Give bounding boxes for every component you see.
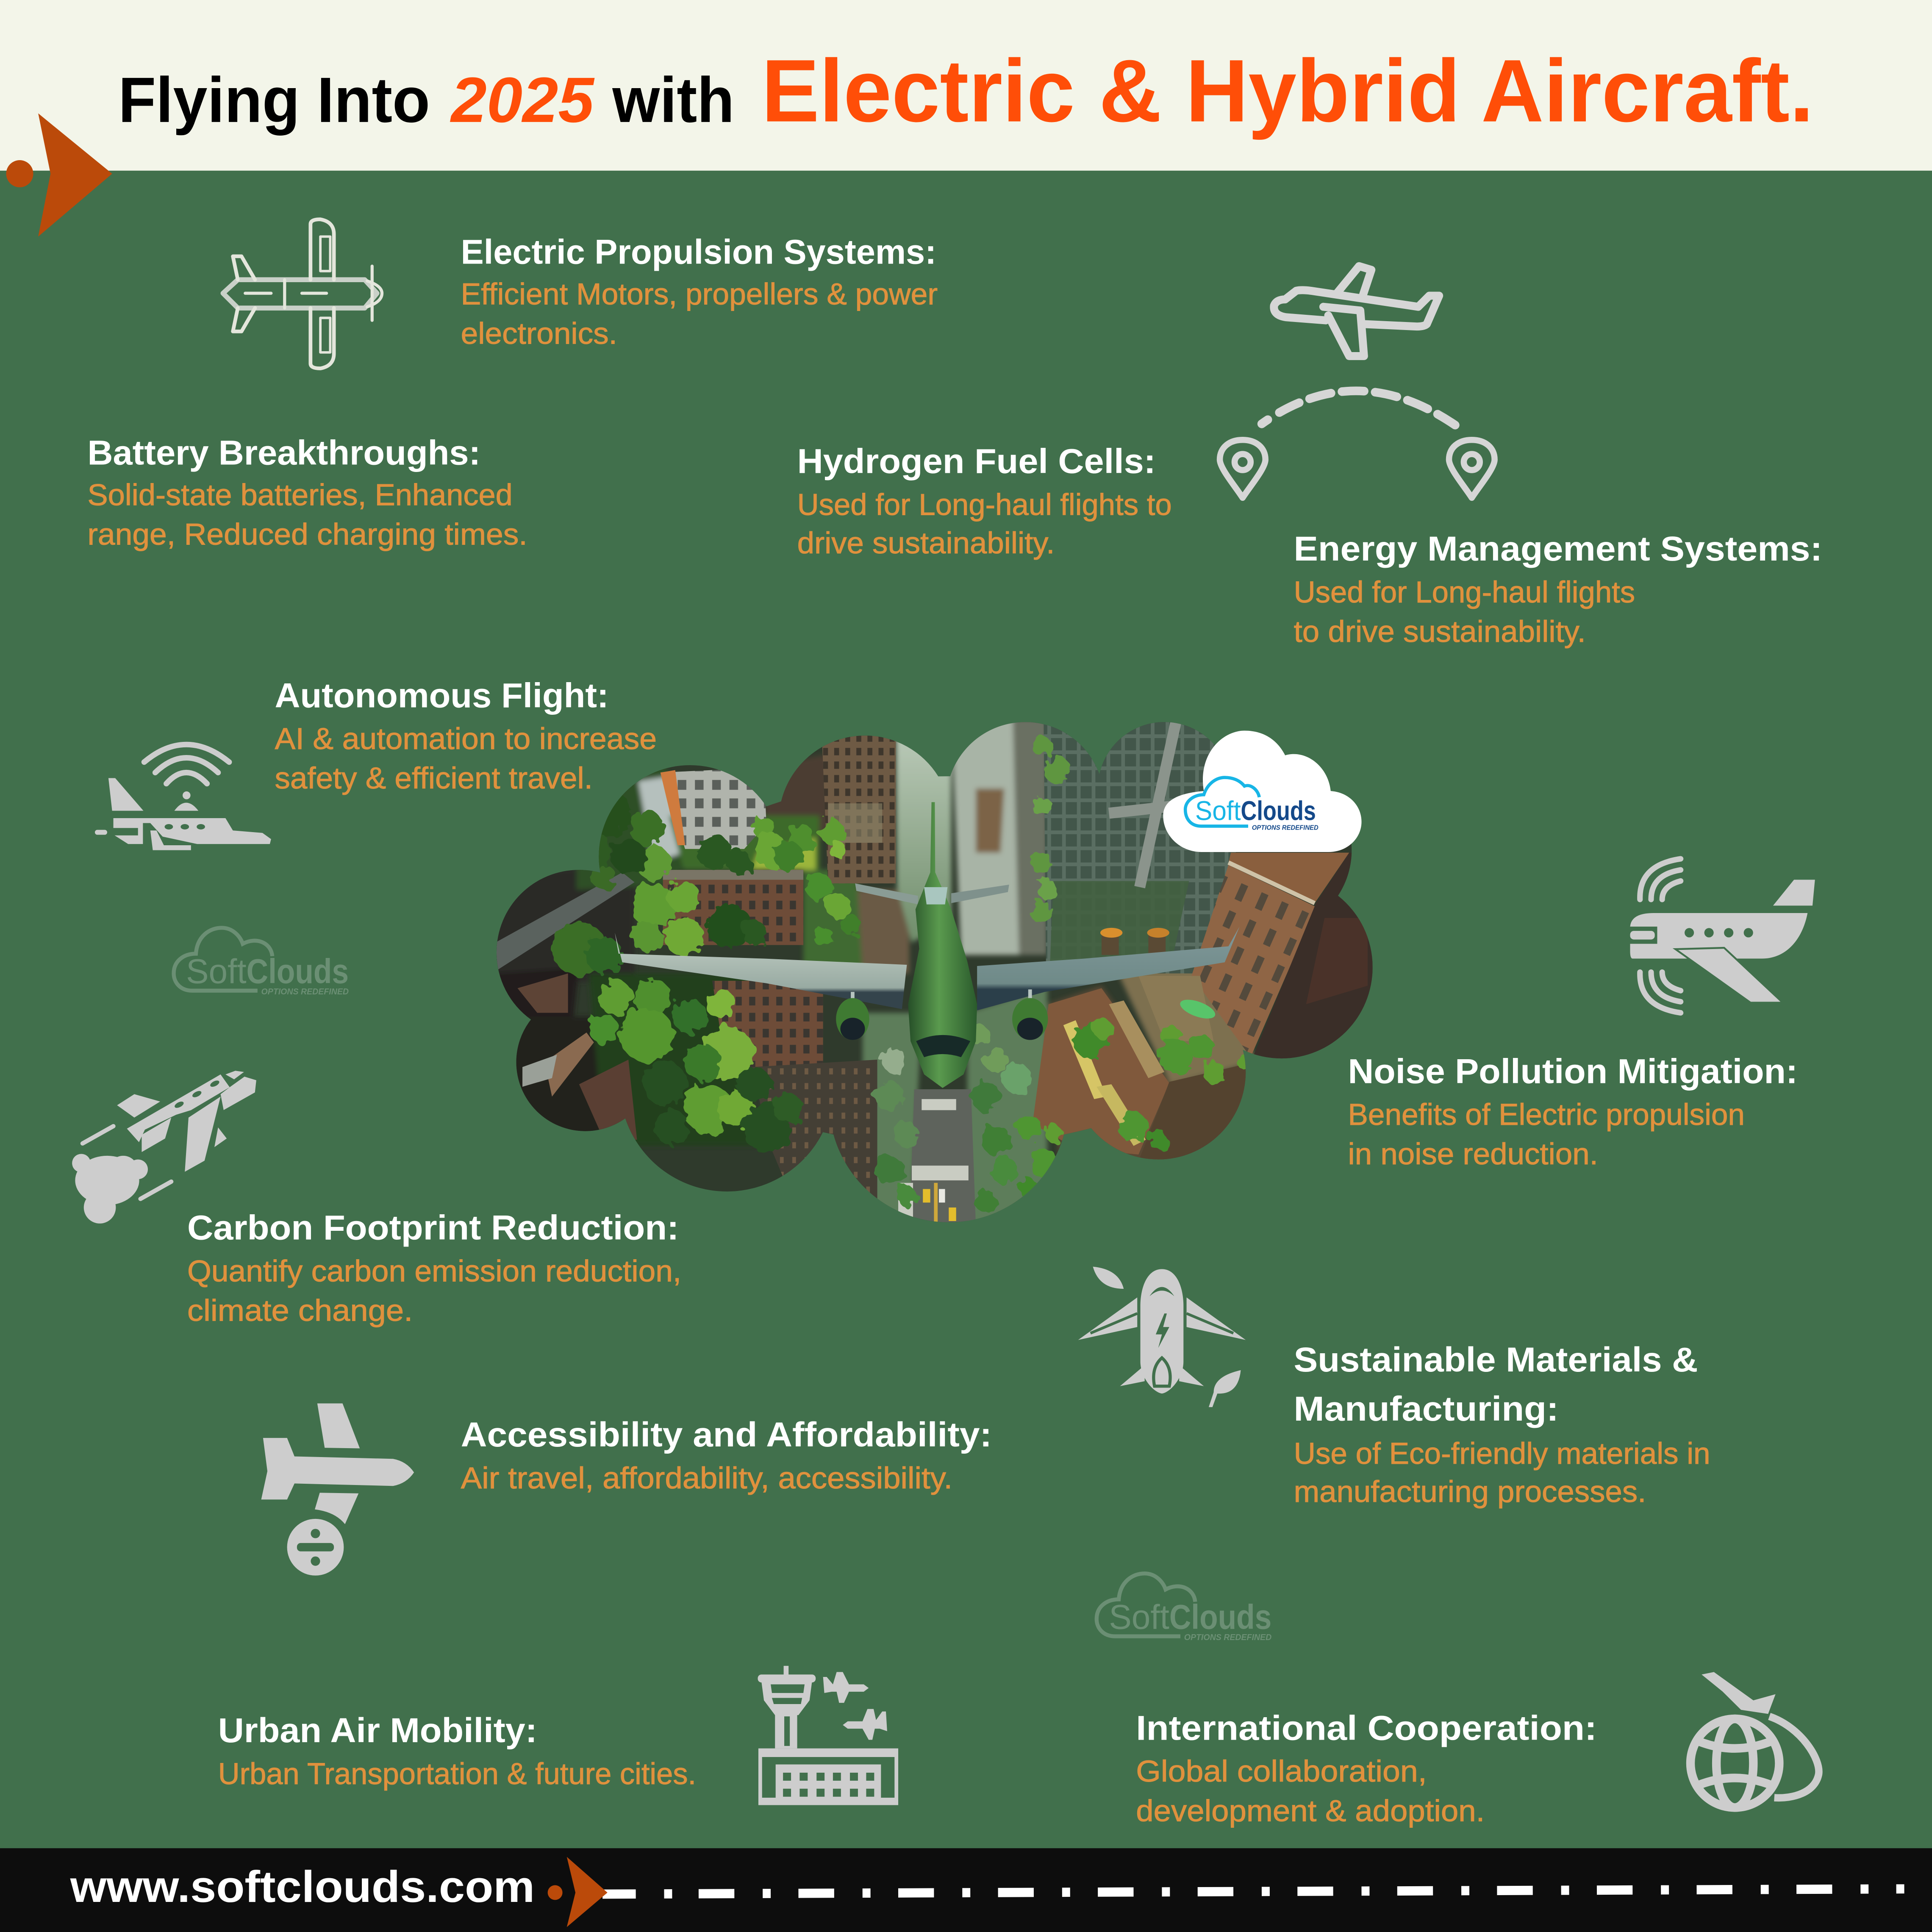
logo: SoftClouds in white cloud	[1163, 731, 1362, 852]
text: international cooperation: development & adoption.	[1136, 1794, 1485, 1828]
heading: carbon: Carbon Footprint Reduction:	[187, 1209, 679, 1247]
city background	[493, 715, 1380, 1226]
watermark logo left	[174, 928, 349, 997]
logo: SoftClouds in white cloud: OPTIONS REDEFINED	[1252, 824, 1319, 832]
icon: noise plane	[1630, 859, 1815, 1013]
heading: sustainable materials: Sustainable Materials &	[1294, 1341, 1698, 1379]
watermark logo right: OPTIONS REDEFINED	[1184, 1633, 1272, 1642]
icon: footer arrow	[548, 1857, 608, 1927]
header band	[0, 0, 1932, 171]
item: noise	[1348, 1052, 1798, 1171]
text: noise: in noise reduction.	[1348, 1137, 1598, 1171]
text: battery: Solid-state batteries, Enhanced	[87, 478, 513, 512]
item: sustainable materials	[1294, 1341, 1710, 1509]
logo: SoftClouds in white cloud: Clouds	[1241, 795, 1316, 826]
title: 2025	[450, 64, 595, 136]
icon: electric propulsion plane	[223, 219, 382, 369]
watermark logo left: Soft	[186, 952, 247, 991]
title: Flying Into	[118, 64, 430, 136]
icon: carbon footprint plane	[72, 1071, 256, 1224]
text: noise	[1348, 1098, 1745, 1171]
heading: urban air mobility: Urban Air Mobility:	[218, 1711, 537, 1750]
text: battery	[87, 478, 527, 551]
heading: autonomous: Autonomous Flight:	[275, 676, 609, 715]
heading: battery: Battery Breakthroughs:	[87, 433, 480, 472]
title: with	[612, 64, 734, 136]
text: hydrogen	[797, 488, 1172, 560]
text: autonomous: AI & automation to increase	[275, 722, 657, 756]
icon: header arrow	[6, 114, 112, 236]
logo: SoftClouds in white cloud: Soft	[1195, 795, 1241, 826]
text: sustainable materials: Use of Eco-friendly materials in	[1294, 1437, 1710, 1471]
heading: sustainable materials: Manufacturing:	[1294, 1390, 1559, 1428]
plane	[615, 802, 1240, 1088]
text: carbon: Quantify carbon emission reduction,	[187, 1254, 681, 1288]
watermark logo right: Soft	[1109, 1598, 1169, 1637]
text: hydrogen: drive sustainability.	[797, 526, 1055, 560]
icon: airport tower	[758, 1666, 898, 1805]
watermark logo right	[1096, 1574, 1272, 1642]
text: international cooperation: Global collaboration,	[1136, 1754, 1427, 1788]
item: urban air mobility	[218, 1711, 696, 1791]
central cloud image	[493, 715, 1380, 1226]
text: accessibility: Air travel, affordability, accessibility.	[461, 1461, 952, 1495]
text: sustainable materials: manufacturing processes.	[1294, 1475, 1646, 1509]
text: carbon: climate change.	[187, 1294, 413, 1328]
icon: globe with plane	[1690, 1672, 1819, 1807]
icon: affordability plane	[261, 1403, 414, 1576]
item: carbon	[187, 1209, 681, 1328]
text: electric propulsion: electronics.	[461, 316, 617, 350]
runway dashes	[602, 1884, 1904, 1899]
item: accessibility	[461, 1416, 992, 1495]
text: sustainable materials	[1294, 1437, 1710, 1509]
heading: hydrogen: Hydrogen Fuel Cells:	[797, 442, 1156, 481]
heading: energy management: Energy Management Systems:	[1294, 530, 1822, 568]
watermark logo right: Clouds	[1169, 1598, 1271, 1637]
item: battery	[87, 433, 527, 551]
item: electric propulsion	[461, 233, 938, 350]
item: autonomous	[275, 676, 657, 795]
text: autonomous	[275, 722, 657, 795]
website url: www.softclouds.com	[70, 1862, 535, 1912]
heading: electric propulsion: Electric Propulsion Systems:	[461, 233, 936, 271]
icon: sustainable materials plane	[1078, 1267, 1246, 1407]
footer band	[0, 1848, 1932, 1932]
text: energy management: to drive sustainability.	[1294, 615, 1586, 649]
text: international cooperation	[1136, 1754, 1485, 1828]
text: hydrogen: Used for Long-haul flights to	[797, 488, 1172, 522]
heading: accessibility: Accessibility and Affordability:	[461, 1416, 992, 1454]
heading: sustainable materials	[1294, 1341, 1698, 1428]
text: energy management	[1294, 575, 1635, 649]
text: electric propulsion	[461, 277, 938, 350]
heading: noise: Noise Pollution Mitigation:	[1348, 1052, 1798, 1091]
text: battery: range, Reduced charging times.	[87, 517, 527, 551]
item: international cooperation	[1136, 1709, 1597, 1828]
item: hydrogen	[797, 442, 1172, 560]
icon: plane with route and pins	[1220, 266, 1495, 498]
watermark logo left: Clouds	[247, 952, 349, 991]
item: energy management	[1294, 530, 1822, 649]
title	[118, 41, 1814, 140]
text: urban air mobility: Urban Transportation & future cities.	[218, 1757, 696, 1791]
text: autonomous: safety & efficient travel.	[275, 761, 593, 795]
icon: autonomous plane with wifi	[95, 744, 271, 850]
text: noise: Benefits of Electric propulsion	[1348, 1098, 1745, 1132]
heading: international cooperation: International Cooperation:	[1136, 1709, 1597, 1747]
title: Electric & Hybrid Aircraft.	[761, 41, 1814, 140]
text: electric propulsion: Efficient Motors, propellers & power	[461, 277, 938, 311]
foliage	[552, 736, 1252, 1213]
text: energy management: Used for Long-haul flights	[1294, 575, 1635, 609]
watermark logo left: OPTIONS REDEFINED	[261, 987, 349, 997]
text: carbon	[187, 1254, 681, 1328]
